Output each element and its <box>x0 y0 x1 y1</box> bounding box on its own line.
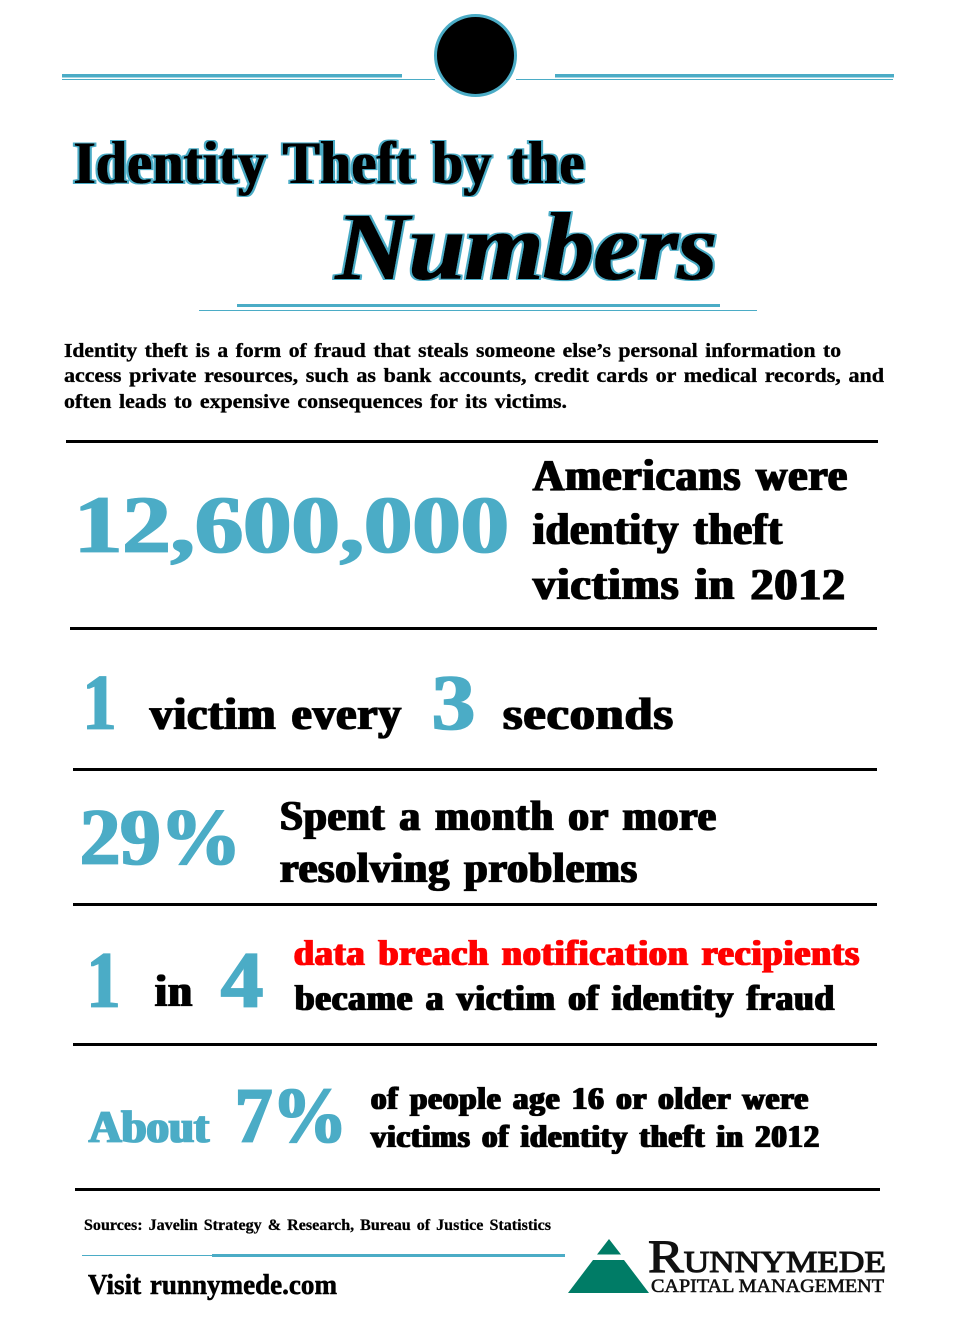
logo: Runnymede Capital Management <box>568 1231 886 1297</box>
title underline <box>199 304 757 311</box>
sources: Sources: Javelin Strategy & Research, Bureau of Justice Statistics <box>84 1217 551 1234</box>
stat: about 7%: victims of identity theft in 2012 <box>371 1118 820 1154</box>
stat: 12,600,000 Americans <box>74 451 848 609</box>
intro paragraph: often leads to expensive consequences for its victims. <box>64 391 567 413</box>
stat: 1 in 4: became a victim of identity fraud <box>295 978 835 1018</box>
stat: 29% <box>80 794 717 892</box>
website link: Visit runnymede.com <box>88 1270 337 1301</box>
stat: 29%: 29% <box>80 794 241 882</box>
stat: 1 in 4: data breach notification recipients <box>294 933 860 973</box>
stat: 29%: resolving problems <box>280 846 638 892</box>
title <box>74 130 717 300</box>
intro paragraph: access private resources, such as bank accounts, credit cards or medical records, and <box>64 365 884 387</box>
stat: about 7%: 7% <box>235 1073 347 1160</box>
stat: 1 victim every 3 seconds <box>83 660 674 747</box>
stat: about 7% <box>89 1073 820 1160</box>
intro paragraph <box>64 340 884 413</box>
title: Identity Theft by the <box>74 130 585 196</box>
title: Numbers <box>335 193 717 300</box>
stat: 1 victim every 3 seconds: 3 <box>432 660 475 747</box>
stat: about 7%: About <box>89 1101 210 1152</box>
stat: 12,600,000 Americans: victims in 2012 <box>533 560 846 609</box>
intro paragraph: Identity theft is a form of fraud that steals someone else’s personal information to <box>64 340 841 362</box>
header ornament <box>62 16 894 96</box>
footer rule <box>82 1254 565 1257</box>
stat: 1 in 4: 1 <box>87 937 120 1025</box>
stat: 1 victim every 3 seconds: victim every <box>150 688 402 739</box>
stat: about 7%: of people age 16 or older were <box>371 1080 809 1116</box>
stat: 1 in 4 <box>87 933 860 1025</box>
logo: Runnymede Capital Management: CAPITAL MANAGEMENT <box>651 1276 884 1297</box>
logo: Runnymede Capital Management: RUNNYMEDE <box>648 1231 886 1283</box>
stat: 12,600,000 Americans: 12,600,000 <box>74 479 509 570</box>
divider rules <box>66 440 880 1191</box>
stat: 1 victim every 3 seconds: 1 <box>83 660 116 747</box>
stat: 1 victim every 3 seconds: seconds <box>503 688 674 739</box>
stat: 1 in 4: 4 <box>221 937 263 1025</box>
stat: 12,600,000 Americans: identity theft <box>533 505 783 554</box>
stat: 12,600,000 Americans: Americans were <box>533 451 848 500</box>
stat: 29%: Spent a month or more <box>280 794 717 840</box>
stat: 1 in 4: in <box>155 965 193 1016</box>
